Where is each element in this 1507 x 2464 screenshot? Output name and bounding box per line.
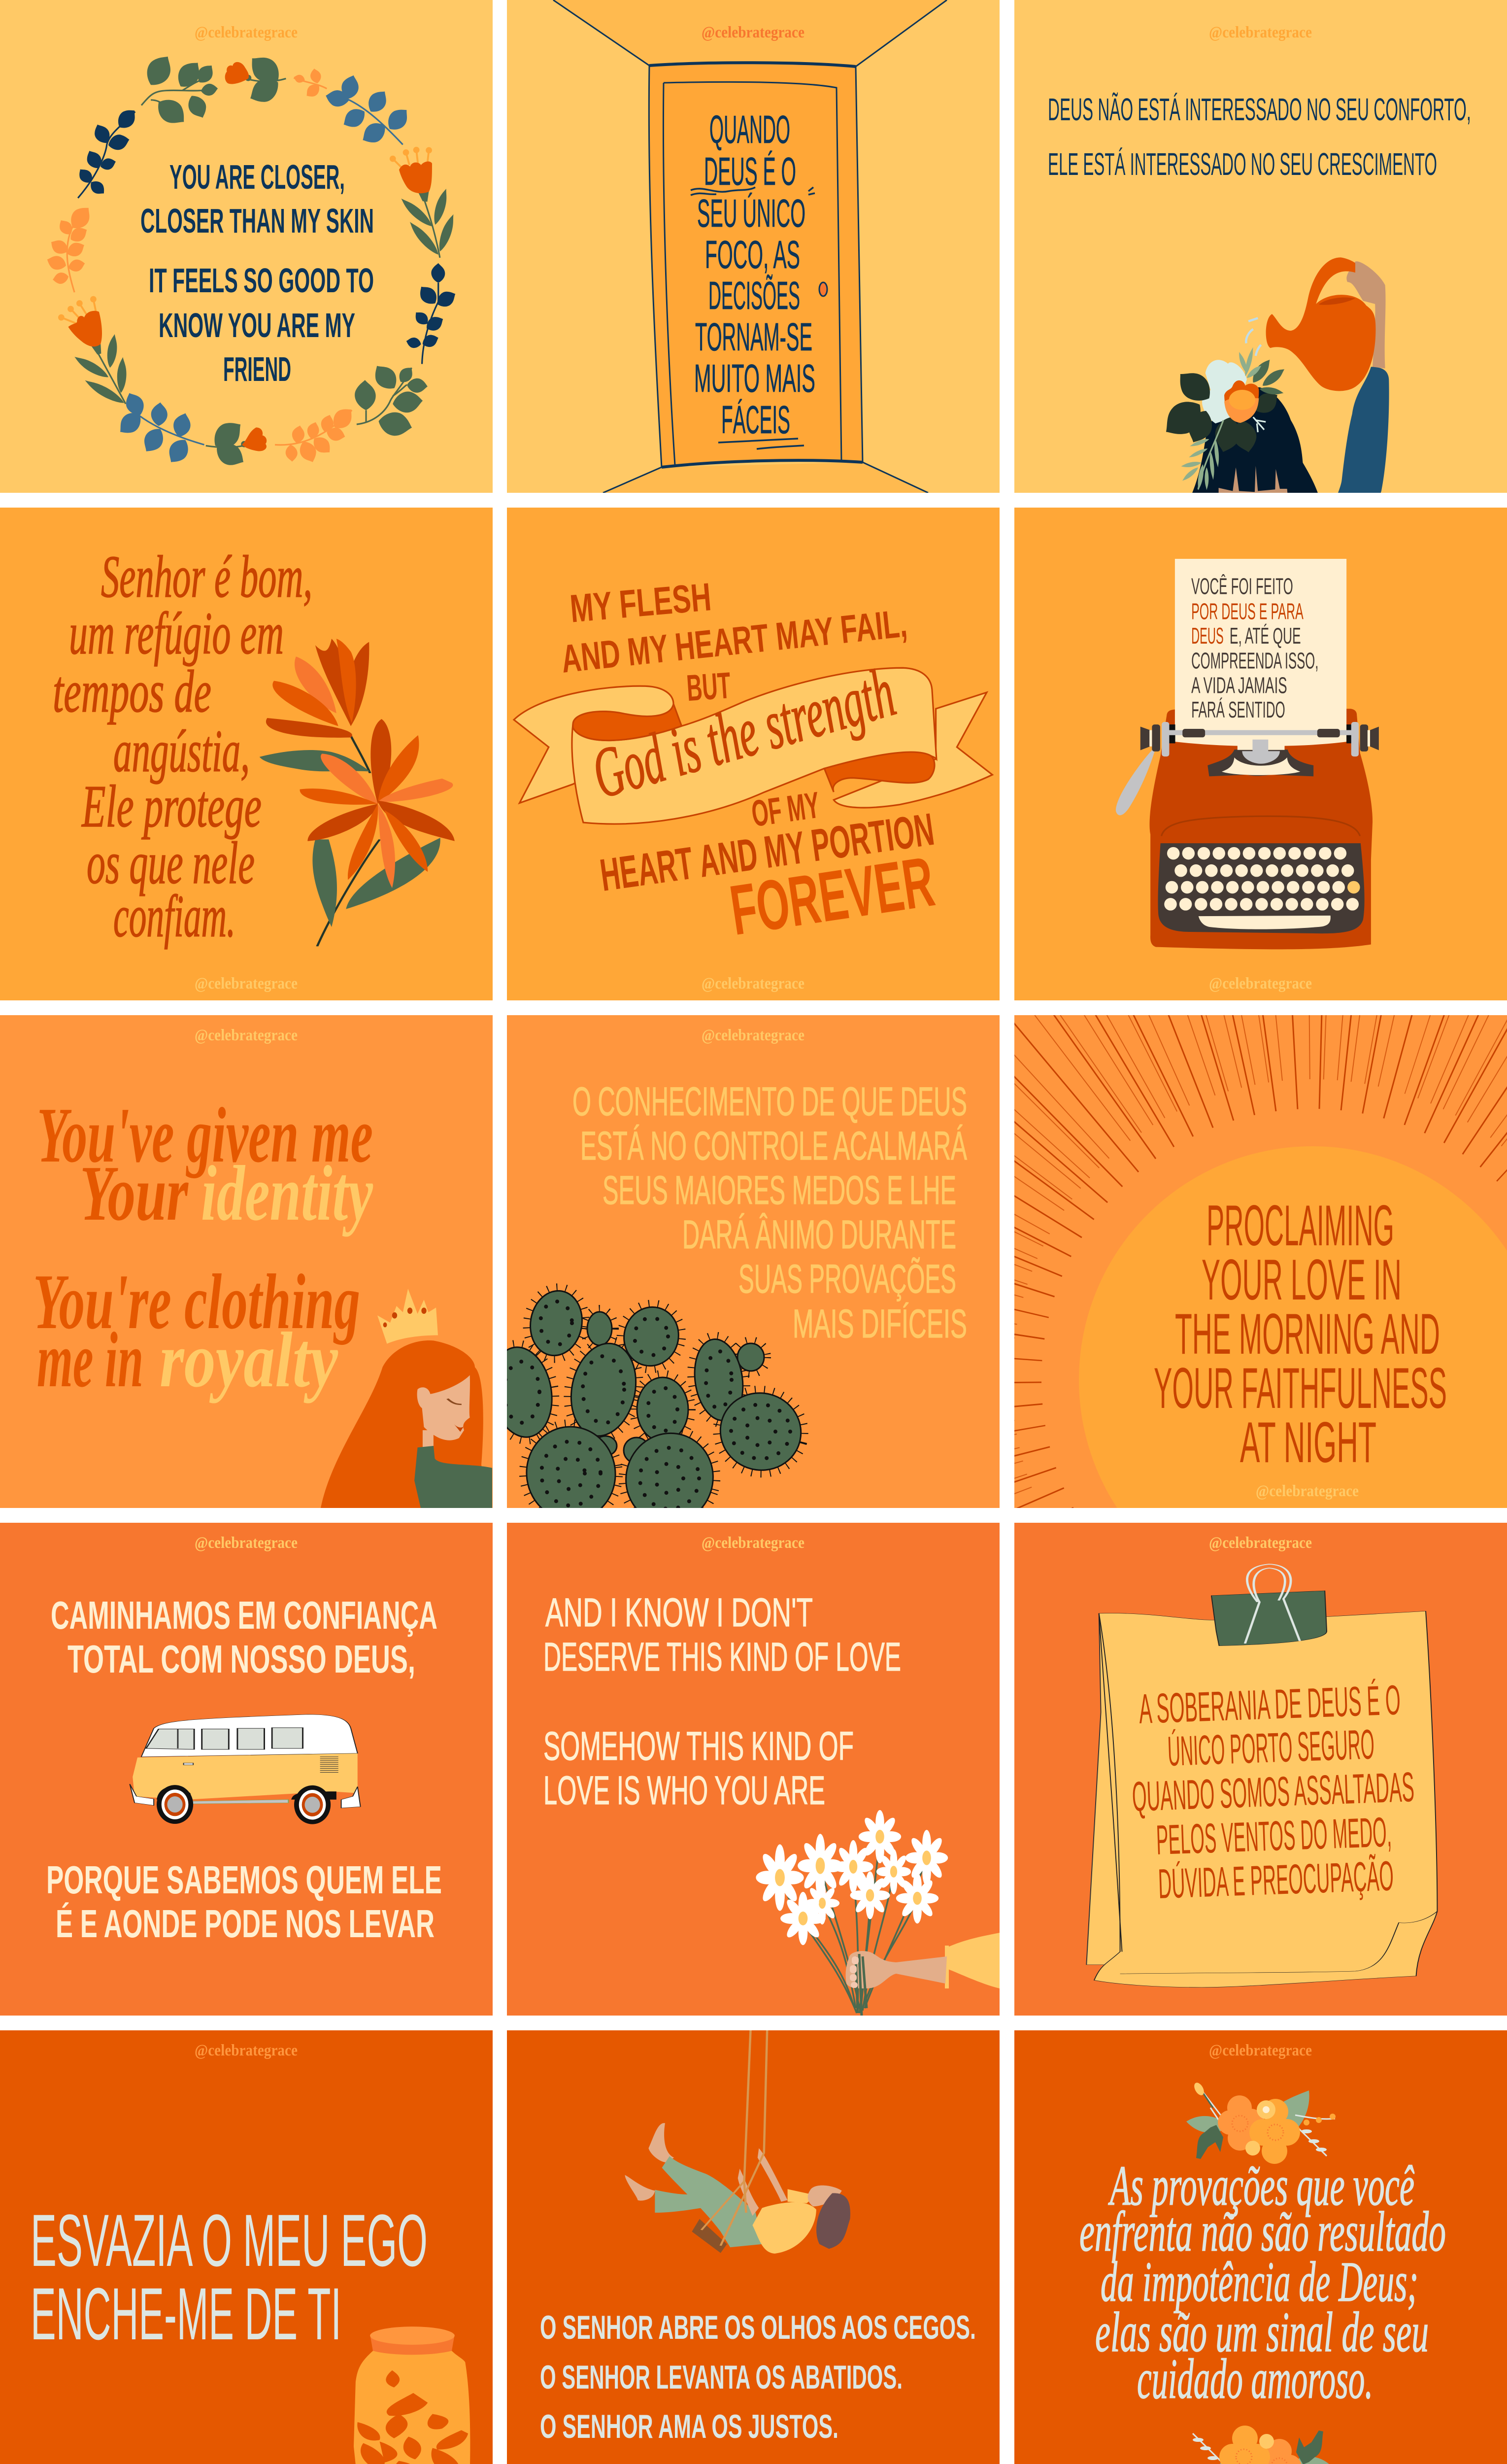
quote text: royalty [160,1316,338,1403]
quote text [46,1593,442,1946]
cactus illustration [480,1282,814,1540]
panel 6: typewriter [1014,508,1507,1000]
quote text: BUT [685,664,732,709]
watermark: @celebrategrace [1209,975,1312,992]
quote text: KNOW YOU ARE MY [159,306,355,344]
queen illustration [321,1289,492,1508]
swing illustration [625,2030,850,2254]
panel 3: girl reading [1014,0,1507,493]
lever [1116,750,1155,815]
paper text: A VIDA JAMAIS [1191,672,1287,698]
quote text: Your [80,1149,189,1237]
quote text [31,2199,428,2355]
quote text [694,107,815,442]
paper text: POR DEUS E PARA [1191,598,1304,624]
bottom floral bouquet [1184,2426,1333,2464]
quote text [1154,1193,1447,1474]
paper note [1086,1564,1437,1987]
sun disc [1049,1117,1507,1643]
paper text: VOCÊ FOI FEITO [1191,573,1293,599]
bouquet illustration [756,1810,1000,2016]
watermark: @celebrategrace [1209,2042,1312,2059]
quote text [1079,2155,1446,2411]
quote text: tempos de [53,658,211,725]
ceiling [553,0,947,67]
panel 8: cactus [507,1015,1000,1508]
watermark: @celebrategrace [1256,1482,1359,1500]
watermark: @celebrategrace [702,24,804,41]
note text [1131,1677,1415,1908]
quote text: O SENHOR AMA OS JUSTOS. [540,2408,838,2445]
quote text [543,1590,901,1813]
paper text: DEUS [1191,623,1224,649]
quote text [572,1079,967,1346]
paper sheet [1175,559,1346,746]
watermark: @celebrategrace [195,2042,298,2059]
quote text [540,2309,976,2445]
quote text: angústia, [113,718,250,785]
quote text [33,1091,373,1403]
ribbon banner [514,668,992,824]
van illustration [130,1714,361,1824]
floral wreath illustration [45,50,459,471]
quote text [1048,92,1471,182]
quote text: OF MY [749,784,822,834]
quote text: MY FLESH [568,575,713,631]
door [649,63,863,467]
typewriter body [1149,709,1373,949]
panel 12: note with binder clip [1014,1523,1507,2016]
floor [603,462,928,493]
quote text: confiam. [113,883,235,950]
quote text: DECISÕES [708,274,800,317]
platen and knobs [1140,722,1379,756]
panel 11: daisies [507,1523,1000,2016]
panel 2: door [507,0,1000,493]
quote text: MUITO MAIS [694,356,815,400]
binder clip [1211,1591,1327,1646]
bottle of hearts [354,2327,470,2464]
quote text: FRIEND [223,350,291,388]
watermark: @celebrategrace [702,1027,804,1044]
quote text: FOCO, AS [705,233,800,276]
quote text [53,544,312,950]
typebar mechanism [1207,750,1313,776]
quote text: Ele protege [81,773,262,840]
panel 9: sun [1014,1015,1507,1508]
paper text: FARÁ SENTIDO [1191,697,1285,722]
watermark: @celebrategrace [1209,24,1312,41]
quote text: DEUS É O [704,149,796,193]
quote text: os que nele [87,830,255,896]
watermark: @celebrategrace [195,1534,298,1552]
watermark: @celebrategrace [195,975,298,992]
paper text: E, ATÉ QUE [1230,623,1301,649]
sun rays [894,961,1507,1799]
panel 10: van [0,1523,493,2016]
hand drawn underlines [691,187,815,449]
quote text [140,158,374,388]
quote text: FÁCEIS [721,398,790,442]
quote text: me in [37,1316,143,1403]
quote text: identity [201,1149,373,1237]
panel 5: banner [507,508,1000,1000]
quote text: AND I KNOW I DON'T [545,1590,813,1635]
paper text: COMPREENDA ISSO, [1191,648,1318,674]
quote text: AT NIGHT [1240,1410,1376,1474]
quote text: TORNAM-SE [695,315,812,359]
watermark: @celebrategrace [195,24,298,41]
keyboard [1158,843,1365,933]
quote text: LOVE IS WHO YOU ARE [543,1768,825,1813]
watermark: @celebrategrace [1209,1534,1312,1552]
panel 7: queen [0,1015,493,1508]
flower illustration [260,639,455,946]
panel 1: wreath [0,0,493,493]
quote text: um refúgio em [69,600,284,667]
panel 13: bottle [0,2030,493,2464]
top floral bouquet [1186,2081,1336,2164]
quote text: QUANDO [709,107,790,151]
perspective lines [553,0,947,493]
quote text: SEU ÚNICO [697,191,805,235]
keys [1164,847,1360,929]
panel 4: lily flower [0,508,493,1000]
panel 14: girl on swing [507,2030,1000,2464]
illustration: girl with book and watering can [1132,257,1389,690]
quote text [559,575,939,950]
watermark: @celebrategrace [702,1534,804,1552]
paper text [1191,573,1318,722]
watermark: @celebrategrace [702,975,804,992]
quote text: Senhor é bom, [101,544,312,610]
quote text: YOU ARE CLOSER, [169,158,345,196]
panel 15: floral quote [1014,2030,1507,2464]
watermark: @celebrategrace [195,1027,298,1044]
